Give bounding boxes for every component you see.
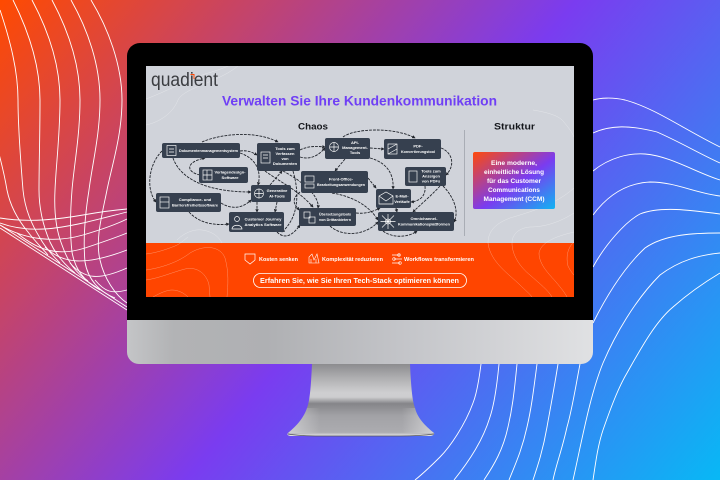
title: Verwalten Sie Ihre Kundenkommunikation (222, 94, 497, 108)
box: Vorlagendesign-Software: Vorlagendesign- (214, 170, 246, 174)
box: Front-Office-Bearbeitungsanwendungen: Bearbeitungsanwendungen (317, 182, 366, 187)
box: Tools zum Anzeigen von PDFs: Tools zum (421, 168, 441, 174)
box: Dokumentenmanagementsystem: Dokumentenmanagementsystem (179, 148, 238, 153)
box: Compliance- und Barrierefreiheitssoftware: Barrierefreiheitssoftware (172, 202, 219, 208)
box: Übersetzungstools von Drittanbietern (299, 208, 356, 226)
box: PDF-Konvertierungstool: PDF- (413, 144, 423, 148)
box: Generative AI-Tools: AI-Tools (269, 194, 286, 198)
box: Omnichannel-Kommunikationsplattformen (378, 212, 454, 231)
box: API-Management-Tools: Management- (342, 145, 369, 150)
callout: CCM solution: einheitliche Lösung (484, 169, 544, 176)
box: API-Management-Tools: API- (351, 140, 360, 145)
box: E-Mail-Verläufe: Verläufe (394, 199, 411, 204)
box: Tools zum Verfassen von Dokumenten: Tools zum (275, 146, 295, 151)
monitor screen (146, 64, 574, 297)
decorative white wave lines, right (415, 98, 720, 480)
callout: CCM solution: Eine moderne, (491, 160, 537, 167)
box: Generative AI-Tools (251, 185, 291, 202)
footer item: Kosten senken: Kosten senken (259, 257, 299, 263)
box: Übersetzungstools von Drittanbietern: von Drittanbietern (319, 217, 352, 222)
box: Tools zum Verfassen von Dokumenten: Dokumenten (273, 161, 298, 166)
box: Compliance- und Barrierefreiheitssoftware: Compliance- und (179, 197, 212, 202)
box: E-Mail-Verläufe (376, 189, 411, 208)
footer item: Workflows transformieren: Workflows transformieren (404, 257, 475, 263)
footer item: Workflows transformieren (392, 254, 475, 264)
decorative white wave lines, left (0, 0, 127, 310)
call-to-action button: Erfahren Sie, wie Sie Ihren Tech-Stack optimieren können (260, 276, 459, 285)
contour lines (146, 64, 574, 297)
footer item: Komplexität reduzieren: Komplexität reduzieren (322, 257, 384, 263)
box: Customer Journey Analytics Software: Customer Journey (244, 216, 282, 222)
box: Compliance- und Barrierefreiheitssoftware (156, 193, 221, 212)
box: Tools zum Verfassen von Dokumenten (257, 143, 300, 171)
box: PDF-Konvertierungstool (384, 139, 441, 159)
callout: CCM solution (473, 152, 555, 209)
box: Dokumentenmanagementsystem (162, 143, 240, 158)
quadient logo: quadient (151, 69, 219, 91)
box: Tools zum Anzeigen von PDFs: Anzeigen (422, 174, 440, 178)
screen background (146, 66, 574, 243)
monitor bezel (127, 43, 593, 320)
box: Vorlagendesign-Software (199, 167, 248, 183)
box: E-Mail-Verläufe: E-Mail- (395, 194, 409, 198)
box: Front-Office-Bearbeitungsanwendungen: Front-Office- (329, 176, 354, 182)
monitor chin (127, 320, 593, 364)
box: Tools zum Verfassen von Dokumenten: von (281, 156, 289, 161)
footer item: Kosten senken (245, 254, 299, 264)
box: PDF-Konvertierungstool: Konvertierungstool (401, 149, 435, 154)
call-to-action button (254, 274, 466, 288)
box: Vorlagendesign-Software: Software (222, 175, 239, 180)
box: Generative AI-Tools: Generative (267, 188, 288, 193)
box: Tools zum Verfassen von Dokumenten: Verfassen (276, 151, 295, 156)
box: Tools zum Anzeigen von PDFs: von PDFs (422, 178, 441, 184)
callout: CCM solution: für das Customer (487, 178, 541, 185)
box: Omnichannel-Kommunikationsplattformen: Kommunikationsplattformen (398, 222, 451, 226)
box: API-Management-Tools (325, 138, 370, 159)
box: Customer Journey Analytics Software (229, 212, 284, 232)
callout: CCM solution: Management (CCM) (484, 196, 544, 203)
box: Front-Office-Bearbeitungsanwendungen (301, 171, 368, 193)
footer item: Komplexität reduzieren (309, 254, 384, 263)
orange footer band (146, 243, 574, 297)
box: Übersetzungstools von Drittanbietern: Übersetzungstools (319, 212, 352, 216)
heading: Struktur: Struktur (494, 122, 536, 132)
dashed connector arrows (150, 130, 456, 236)
monitor stand (287, 364, 434, 436)
box: Tools zum Anzeigen von PDFs (405, 167, 446, 186)
callout: CCM solution: Communications (488, 187, 540, 194)
heading: Chaos: Chaos (298, 122, 328, 132)
box: API-Management-Tools: Tools (350, 150, 361, 155)
box: Omnichannel-Kommunikationsplattformen: Omnichannel- (410, 216, 438, 221)
divider between chaos and structure (464, 130, 465, 236)
box: Customer Journey Analytics Software: Analytics Software (244, 222, 282, 227)
